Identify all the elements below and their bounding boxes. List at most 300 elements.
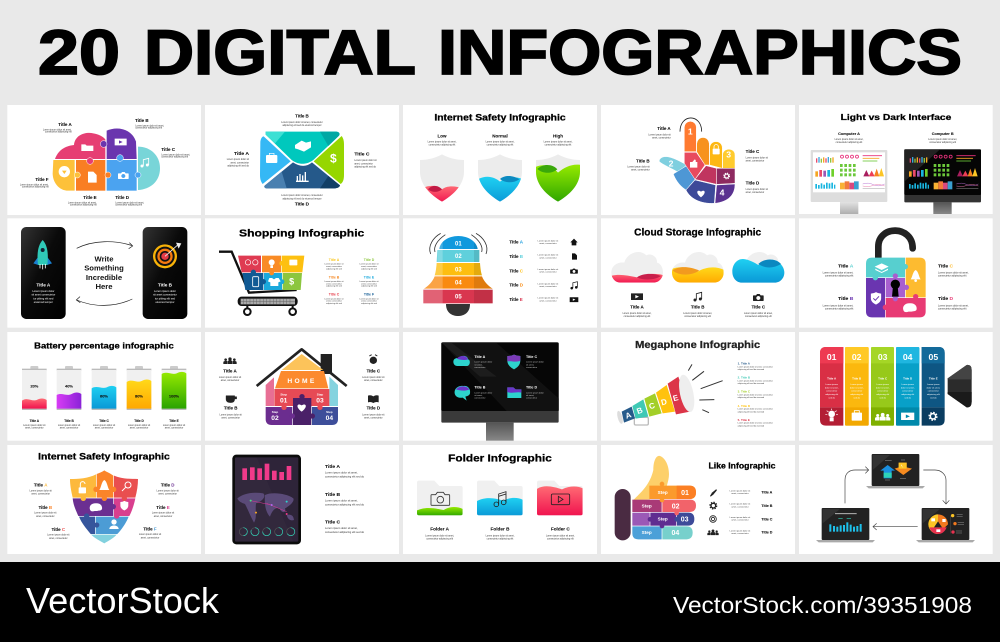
- thumb puzzle: Step: [642, 504, 652, 509]
- cloud labels: Title D: [115, 195, 130, 200]
- bell legend: amet, consectetur: [539, 242, 557, 245]
- shield puzzle labels: amet, consectetur: [158, 493, 177, 496]
- cloud labels: Title A: [630, 305, 644, 310]
- thumb puzzle: 04: [671, 530, 679, 537]
- house labels: Title D: [367, 406, 381, 411]
- shield puzzle labels: Lorem ipsum dolor sit: [34, 512, 57, 515]
- cloud labels: Lorem ipsum dolor sit amet,: [43, 128, 72, 131]
- cart legend: amet, consectetur: [361, 282, 377, 285]
- padlock labels: Title A: [838, 264, 854, 270]
- padlock labels: Title C: [938, 264, 954, 270]
- cart legend: Title A: [329, 258, 340, 262]
- footer brand: VectorStock: [26, 580, 220, 621]
- thumb puzzle: [615, 456, 696, 540]
- column 04: adipiscing elit: [901, 393, 915, 396]
- tablet labels: consectetur adipiscing elit sed do: [325, 530, 365, 534]
- bell body: [423, 233, 493, 316]
- panel: padlock: [799, 218, 993, 328]
- column 01: Title A: [827, 376, 837, 380]
- phone right: Lorem ipsum dolor: [154, 289, 176, 293]
- column 02: sed do: [853, 397, 861, 399]
- monitor items: Lorem ipsum dolor: [526, 391, 544, 394]
- megaphone legend: Lorem ipsum dolor sit amet, consectetur: [738, 422, 773, 425]
- hand numbers and icons: 2: [669, 158, 674, 168]
- battery 20: [22, 366, 47, 430]
- heading: Cloud Storage Infographic: [634, 228, 761, 239]
- cart frame: [219, 252, 298, 315]
- bell legend: amet, consectetur: [539, 299, 557, 302]
- hand labels: Title C: [746, 149, 760, 154]
- column 04: consectetur: [902, 390, 914, 393]
- bell numbers: 03: [455, 267, 462, 273]
- hand labels: [627, 126, 768, 194]
- battery 80: Lorem ipsum dolor sit: [128, 424, 150, 427]
- tablet: [232, 455, 301, 544]
- like legend: Lorem ipsum dolor sit: [730, 489, 751, 492]
- cart legend: Lorem ipsum dolor sit: [325, 280, 344, 283]
- cart legend: adipiscing elit sed: [326, 302, 342, 305]
- padlock labels: consectetur adipiscing elit: [825, 308, 854, 311]
- cloud labels: Lorem ipsum dolor sit amet,: [744, 312, 773, 315]
- shield: high: Lorem ipsum dolor sit amet,: [544, 140, 573, 143]
- shield: normal: Normal: [492, 133, 508, 138]
- bell legend: Title C: [509, 268, 524, 273]
- house labels: amet, consectetur: [364, 416, 383, 419]
- cart legend: adipiscing elit sed: [361, 285, 377, 288]
- shield puzzle labels: amet, consectetur: [141, 536, 159, 539]
- envelope labels: [227, 114, 377, 207]
- cart legend: Lorem ipsum dolor sit: [325, 263, 344, 266]
- arrow: bottom: [76, 297, 132, 305]
- column 02: 02: [852, 352, 862, 362]
- cloud labels: Title C: [161, 147, 176, 152]
- tablet world map: [237, 493, 294, 523]
- bell legend: amet, consectetur: [539, 285, 557, 288]
- column 01: Lorem ipsum: [825, 383, 838, 386]
- megaphone: C: [648, 401, 656, 411]
- panel: bell: [403, 218, 597, 328]
- envelope labels: Title C: [354, 152, 370, 158]
- panel: tablet dashboard: [205, 445, 399, 554]
- megaphone: A: [624, 410, 633, 421]
- megaphone legend: 2. Title B: [738, 376, 751, 380]
- cart legend: [325, 258, 379, 305]
- megaphone: B: [635, 406, 644, 416]
- battery 100: 100%: [169, 394, 180, 399]
- column 05: dolor sit amet,: [927, 386, 941, 389]
- cloud labels: Lorem ipsum dolor sit amet,: [68, 201, 97, 204]
- tablet bar chart: [242, 464, 291, 480]
- shield: high: consectetur adipiscing elit: [545, 143, 572, 146]
- shield: low: [419, 133, 465, 203]
- column 05: consectetur: [928, 390, 939, 393]
- bell numbers: [455, 241, 462, 300]
- battery 60: amet, consectetur: [95, 427, 113, 430]
- megaphone legend: Lorem ipsum dolor sit amet, consectetur: [738, 365, 773, 368]
- megaphone legend: Lorem ipsum dolor sit amet, consectetur: [738, 393, 773, 396]
- hand puzzle: [659, 118, 735, 203]
- envelope icons: [266, 141, 337, 181]
- cloud labels: Lorem ipsum dolor sit amet,: [161, 153, 190, 156]
- padlock labels: [823, 264, 969, 311]
- phone left: Lorem ipsum dolor: [32, 289, 54, 293]
- hand numbers and icons: 1: [688, 127, 693, 137]
- tablet labels: Title A: [325, 464, 340, 470]
- thumb puzzle: 01: [681, 490, 689, 497]
- megaphone legend: 1. Title A: [738, 362, 751, 366]
- battery 20: amet, consectetur: [25, 427, 44, 430]
- like legend: amet, consectetur: [731, 519, 749, 522]
- shield puzzle pieces: [70, 470, 138, 543]
- arrow: top to right: [923, 470, 949, 504]
- panel: like thumb: [601, 445, 795, 554]
- column 03: consectetur: [877, 390, 889, 393]
- cart legend: adipiscing elit sed: [326, 267, 342, 270]
- cloud C: [732, 252, 784, 283]
- column 03: adipiscing elit: [876, 393, 890, 396]
- battery 40: Title B: [64, 419, 75, 423]
- panel: envelope: [205, 105, 399, 215]
- center text: Here: [95, 282, 113, 291]
- megaphone legend: [738, 362, 773, 427]
- cloud labels: Lorem ipsum dolor sit amet,: [20, 183, 49, 186]
- folder A: consectetur adipiscing elit: [426, 538, 453, 541]
- envelope labels: Title A: [234, 151, 249, 157]
- tablet labels: Lorem ipsum dolor sit amet,: [325, 498, 358, 502]
- panel: puzzle cloud: [7, 105, 201, 215]
- column 01: dolor sit amet,: [825, 386, 839, 389]
- cloud labels: Title F: [35, 177, 49, 182]
- panel: pointing hand: [601, 105, 795, 215]
- cloud B: [671, 252, 724, 283]
- house puzzle: Step: [280, 393, 287, 397]
- column 04: Lorem ipsum: [901, 383, 914, 386]
- main title: DIGITAL: [144, 18, 416, 88]
- cart puzzle: [238, 256, 304, 290]
- center text: Something: [84, 264, 124, 273]
- center text: [84, 255, 124, 291]
- main title: 20: [38, 18, 120, 88]
- hand labels: amet, consectetur: [746, 159, 764, 162]
- folder C: Folder C: [551, 526, 570, 531]
- shield puzzle labels: Lorem ipsum dolor sit: [139, 533, 161, 536]
- column 02: Lorem ipsum: [850, 383, 863, 386]
- cloud labels: Title B: [691, 305, 705, 310]
- phone right: Title B: [158, 283, 173, 288]
- battery 80: amet, consectetur: [130, 427, 148, 430]
- column 03: Title C: [878, 376, 888, 380]
- shield puzzle labels: Lorem ipsum dolor sit: [152, 512, 174, 515]
- panel: cloud storage: [601, 218, 795, 328]
- monitor body: [441, 342, 559, 441]
- column 03: Lorem ipsum: [876, 383, 889, 386]
- battery 60: [92, 366, 116, 430]
- cloud A: [610, 252, 664, 283]
- column 05: Title E: [929, 376, 938, 380]
- heading: Folder Infographic: [448, 453, 552, 464]
- battery 80: 80%: [135, 394, 143, 399]
- column 04: sed do: [904, 397, 912, 399]
- monitor items: Lorem ipsum dolor: [526, 361, 544, 364]
- cloud labels: Title A: [58, 122, 72, 127]
- panel: two phones: [7, 218, 201, 328]
- battery 20: Lorem ipsum dolor sit: [23, 424, 46, 427]
- cart legend: Title E: [364, 275, 375, 279]
- folder C: consectetur adipiscing elit: [547, 538, 574, 541]
- monitor items: [453, 355, 544, 401]
- column 04: 04: [903, 352, 913, 362]
- phone right: sit amet consectetur: [153, 293, 177, 297]
- panel: laptops cycle: [799, 445, 993, 554]
- envelope labels: Title D: [295, 202, 310, 207]
- folder B: Lorem ipsum dolor sit amet,: [486, 535, 515, 538]
- column 05: [922, 347, 945, 426]
- tablet labels: [325, 464, 365, 534]
- hand labels: Title D: [746, 181, 760, 186]
- heading: Internet Safety Infographic: [38, 452, 170, 462]
- shield puzzle labels: [30, 483, 179, 540]
- bell numbers: 02: [455, 254, 462, 260]
- shield puzzle labels: Title D: [161, 483, 175, 488]
- tablet labels: consectetur adipiscing elit sed do: [325, 502, 365, 506]
- like legend: Title D: [761, 531, 773, 535]
- column 01: adipiscing elit: [825, 393, 839, 396]
- battery 20: 20%: [30, 384, 39, 389]
- bell legend: Lorem ipsum dolor sit: [538, 268, 559, 271]
- column 01: sed do: [828, 397, 836, 399]
- like legend: amet, consectetur: [731, 505, 749, 508]
- monitor items: consectetur: [526, 397, 537, 400]
- hand labels: Title B: [636, 158, 650, 163]
- envelope labels: adipiscing elit sed do: [227, 165, 250, 168]
- like legend: Title C: [761, 517, 773, 521]
- like legend: Title B: [761, 504, 773, 508]
- megaphone legend: 3. Title C: [738, 390, 751, 394]
- megaphone: D: [660, 397, 668, 407]
- monitor: computer B: Computer B: [932, 132, 954, 136]
- megaphone: E: [672, 393, 680, 403]
- house puzzle: [257, 349, 347, 425]
- shield puzzle labels: Lorem ipsum dolor sit: [47, 534, 70, 537]
- cart legend: amet, consectetur: [326, 265, 342, 268]
- phone right: [143, 227, 187, 319]
- house labels: amet, consectetur: [221, 379, 239, 382]
- phone left: tur pibing elit sed: [33, 296, 54, 300]
- bell legend: Title D: [509, 283, 524, 288]
- bell legend: amet, consectetur: [539, 271, 557, 274]
- shield: low: Lorem ipsum dolor sit amet,: [428, 140, 457, 143]
- shield puzzle labels: amet, consectetur: [31, 493, 50, 496]
- monitor items: Title A: [474, 355, 486, 359]
- shield puzzle labels: Lorem ipsum dolor sit: [30, 489, 52, 492]
- monitor: computer B: [904, 132, 981, 214]
- padlock labels: Title B: [838, 296, 854, 302]
- hand labels: Lorem ipsum dolor sit: [746, 188, 768, 191]
- shield: normal: [477, 133, 523, 203]
- cloud labels: consectetur adipiscing elit: [115, 204, 142, 207]
- laptop left: [816, 508, 875, 542]
- column 03: dolor sit amet,: [876, 386, 890, 389]
- cart legend: Title B: [329, 275, 340, 279]
- house labels: Title C: [367, 368, 381, 373]
- cloud labels: [20, 118, 190, 207]
- sound lines: [688, 364, 723, 413]
- tablet labels: Title B: [325, 492, 341, 498]
- bell legend: Lorem ipsum dolor sit: [538, 297, 559, 300]
- bell legend: Lorem ipsum dolor sit: [538, 282, 559, 285]
- footer url: VectorStock.com/39351908: [673, 592, 972, 618]
- envelope icons: $: [330, 152, 337, 166]
- envelope labels: Lorem ipsum dolor sit: [227, 158, 249, 161]
- megaphone legend: Lorem ipsum dolor sit amet, consectetur: [738, 408, 773, 411]
- bell legend: Lorem ipsum dolor sit: [538, 254, 559, 257]
- battery 60: Lorem ipsum dolor sit: [93, 424, 115, 427]
- battery 100: Title E: [169, 419, 179, 423]
- cart legend: adipiscing elit sed: [361, 302, 377, 305]
- thumb puzzle: Step: [658, 517, 668, 522]
- envelope labels: adipiscing elit sed do: [354, 166, 377, 169]
- shield: high: [535, 133, 581, 203]
- padlock labels: Title D: [938, 296, 954, 302]
- hand labels: Lorem ipsum dolor sit: [627, 166, 650, 169]
- shield puzzle labels: amet, consectetur: [154, 515, 172, 518]
- column 05: adipiscing elit: [927, 393, 940, 396]
- house puzzle: Step: [272, 410, 278, 414]
- house puzzle: Step: [317, 393, 323, 397]
- phone right: tur pibing elit sed: [155, 296, 176, 300]
- battery 60: Title C: [99, 419, 110, 423]
- panel: internet safety shields: [403, 105, 597, 215]
- cloud labels: Lorem ipsum dolor sit amet,: [135, 124, 164, 127]
- cart legend: amet, consectetur: [326, 282, 342, 285]
- monitor items: consectetur: [526, 366, 537, 369]
- hand labels: amet, consectetur: [631, 169, 650, 172]
- bell legend: Title E: [509, 297, 523, 302]
- cart legend: Title C: [329, 293, 340, 297]
- column 02: dolor sit amet,: [850, 386, 864, 389]
- tablet labels: Lorem ipsum dolor sit amet,: [325, 470, 358, 474]
- column 04: Title D: [903, 376, 913, 380]
- panel: megaphone: [601, 332, 795, 441]
- battery 40: amet, consectetur: [60, 427, 78, 430]
- monitor items: sit amet,: [526, 394, 535, 397]
- center text: Incredible: [86, 273, 122, 282]
- house labels: [219, 355, 385, 419]
- monitor: computer A: consectetur adipiscing elit: [836, 141, 863, 144]
- cloud labels: Lorem ipsum dolor sit amet,: [115, 201, 144, 204]
- bell legend: Title B: [509, 254, 524, 259]
- monitor items: consectetur: [474, 366, 486, 369]
- monitor items: sit amet,: [526, 363, 535, 366]
- megaphone legend: adipiscing elit sed do eiusmod: [738, 424, 764, 427]
- shield: low: Low: [438, 133, 447, 138]
- house labels: Title B: [224, 406, 238, 411]
- heading: Battery percentage infographic: [34, 341, 174, 351]
- house puzzle: Step: [326, 410, 333, 414]
- column 03: [871, 347, 894, 426]
- panel: house: [205, 332, 399, 441]
- cart legend: Lorem ipsum dolor sit: [360, 263, 379, 266]
- thumb puzzle: Step: [642, 530, 652, 535]
- laptop top: [866, 454, 925, 488]
- shield puzzle labels: Title F: [143, 526, 157, 531]
- padlock: [866, 231, 926, 317]
- battery 100: Lorem ipsum dolor sit: [163, 424, 185, 427]
- folder C: [536, 481, 583, 541]
- megaphone: [616, 373, 697, 425]
- monitor items: sit amet,: [474, 363, 483, 366]
- panel: folders: [403, 445, 597, 554]
- like legend: Lorem ipsum dolor sit: [730, 503, 751, 506]
- column 01: 01: [827, 352, 837, 362]
- cloud icons: [59, 139, 149, 183]
- monitor: computer A: Lorem ipsum dolor sit amet,: [835, 138, 864, 141]
- house puzzle: 01: [280, 397, 288, 404]
- panel: battery percentage: [7, 332, 201, 441]
- panel: dark monitor: [403, 332, 597, 441]
- camera lens: [948, 365, 972, 407]
- main title: [38, 18, 962, 88]
- envelope labels: adipiscing elit sed do eiusmod tempor: [283, 124, 322, 127]
- padlock icons: [871, 263, 921, 312]
- megaphone legend: adipiscing elit sed do eiusmod: [738, 396, 764, 399]
- house puzzle: 04: [326, 415, 333, 422]
- folder A: [416, 481, 463, 541]
- column 01: [820, 347, 843, 426]
- heading: Megaphone Infographic: [635, 340, 760, 351]
- envelope labels: amet, consectetur: [354, 162, 373, 165]
- bell legend: Title A: [509, 240, 524, 245]
- folder C: Lorem ipsum dolor sit amet,: [546, 535, 575, 538]
- megaphone legend: Lorem ipsum dolor sit amet, consectetur: [738, 379, 773, 382]
- monitor items: Title B: [474, 386, 486, 390]
- column 02: Title B: [852, 376, 862, 380]
- like legend: Title A: [761, 491, 773, 495]
- megaphone legend: 4. Title D: [738, 404, 751, 408]
- envelope labels: Lorem ipsum dolor sit amet, consectetur: [281, 121, 323, 124]
- column 05: 05: [929, 352, 938, 362]
- column 04: [896, 347, 919, 426]
- battery 80: [127, 366, 151, 430]
- shield: normal: consectetur adipiscing elit: [487, 143, 514, 146]
- tablet labels: Title C: [325, 520, 341, 526]
- shield puzzle labels: amet, consectetur: [49, 537, 68, 540]
- column 03: 03: [878, 352, 888, 362]
- battery 20: Title A: [30, 419, 40, 423]
- shield puzzle icons: [79, 480, 131, 529]
- column 01: consectetur: [826, 390, 838, 393]
- folder A: Lorem ipsum dolor sit amet,: [425, 535, 454, 538]
- arrow: left to top: [845, 467, 869, 503]
- panel: light vs dark interface: [799, 105, 993, 214]
- battery 40: 40%: [65, 384, 73, 389]
- padlock labels: Lorem ipsum dolor sit amet,: [823, 271, 854, 274]
- hand labels: Title A: [657, 126, 671, 131]
- cloud labels: [623, 292, 773, 318]
- cart legend: Title D: [364, 258, 375, 262]
- bell legend: amet, consectetur: [539, 256, 557, 259]
- heading: Shopping Infographic: [239, 228, 365, 239]
- folder A: Folder A: [430, 526, 450, 531]
- thumb puzzle: Step: [658, 490, 668, 495]
- monitor: computer B: consectetur adipiscing elit: [929, 141, 956, 144]
- panel: shopping cart: [205, 218, 399, 328]
- cloud labels: Title E: [83, 195, 97, 200]
- like legend: amet, consectetur: [731, 532, 749, 535]
- envelope labels: amet, consectetur: [230, 161, 249, 164]
- bell numbers: 04: [455, 281, 462, 287]
- phone left: eiusmod tempor: [34, 300, 53, 304]
